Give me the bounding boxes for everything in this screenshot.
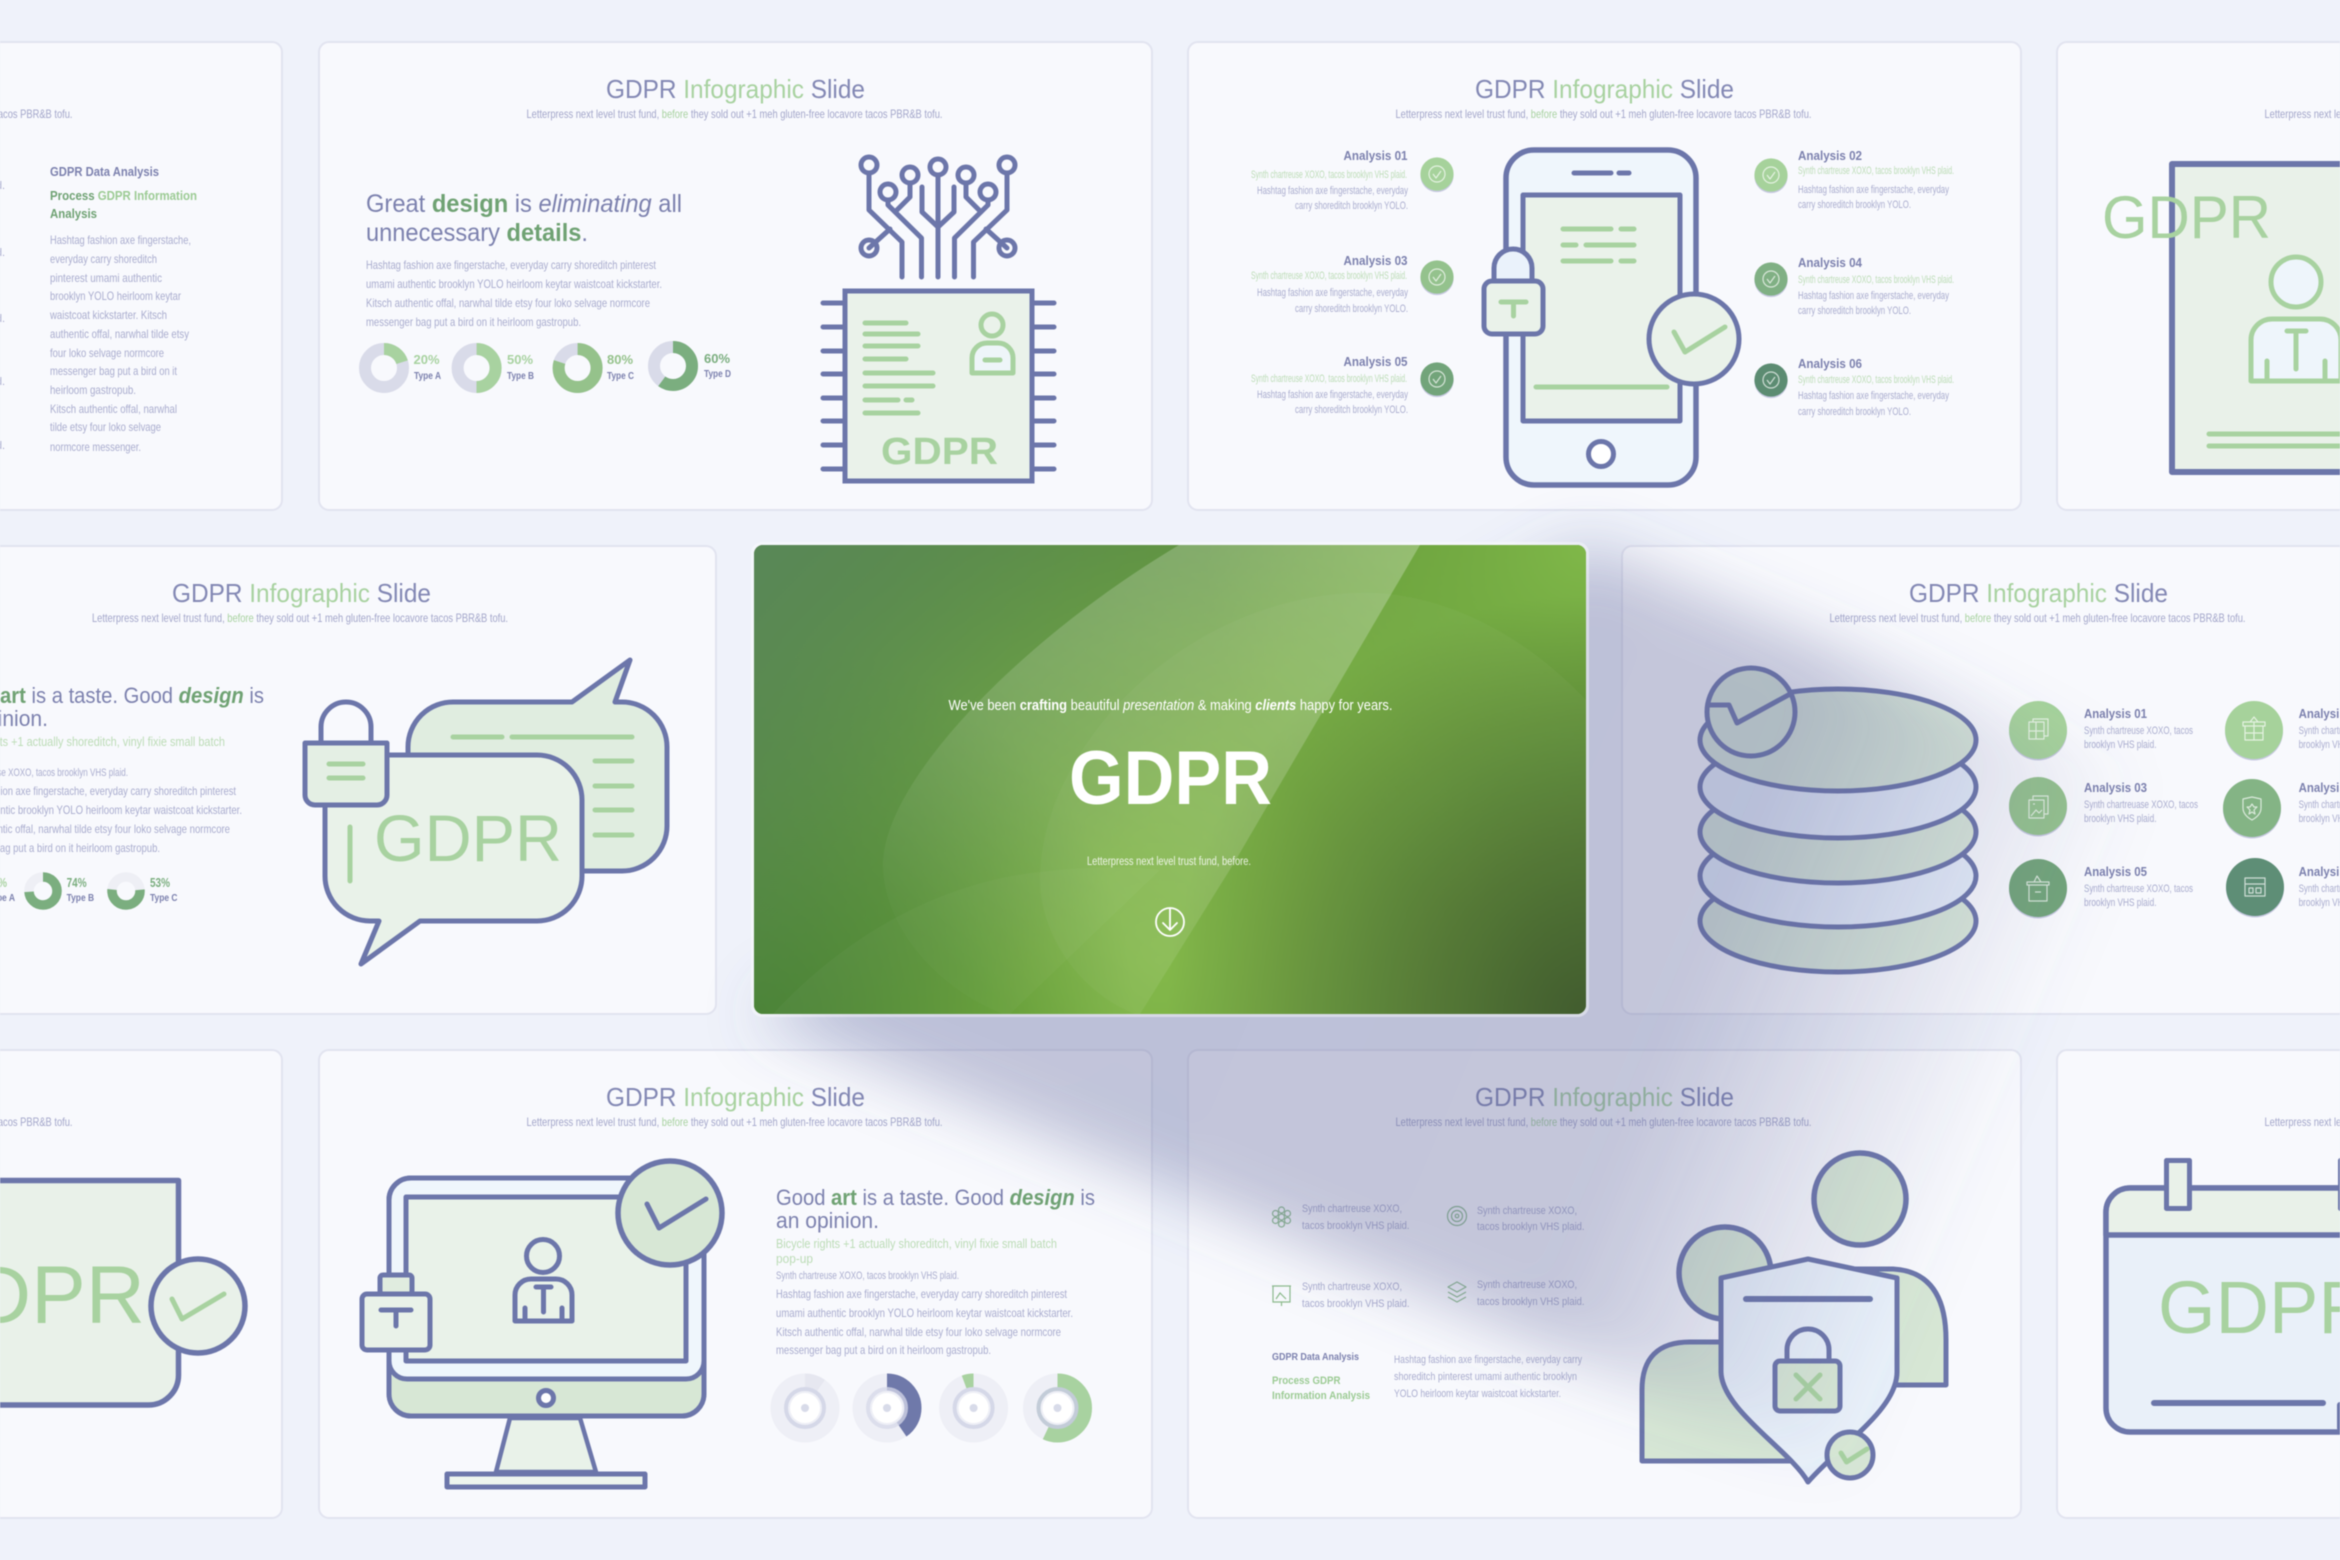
donut chart: Type C 53%: Type C (150, 893, 178, 904)
subtitle: Letterpress next level trust fund, before they sold out +1 meh gluten-free locavore tacos PBR&B tofu. (1830, 611, 2246, 625)
feature item 1 (1272, 1203, 1410, 1232)
panel: top-left slide, data analysis text: Analysis (50, 207, 97, 221)
panel: top slide with phone illustration (1188, 42, 2021, 510)
text block: data analysis heading (1272, 1351, 1370, 1402)
text block: Analysis 06: Analysis 06 (1798, 356, 1862, 371)
subtitle: Letterpress next level trust fund, before they sold out +1 meh gluten-free locavore tacos PBR&B tofu. (526, 107, 942, 121)
body text: umami authentic brooklyn YOLO heirloom keytar waistcoat kickstarter. (776, 1306, 1073, 1320)
text block: data analysis heading: Process GDPR (1272, 1375, 1341, 1387)
feature item 1: tacos brooklyn VHS plaid. (1302, 1220, 1410, 1232)
headline text (366, 190, 682, 247)
icon: GDPR chip (823, 291, 1054, 481)
text block: Analysis 06 (1798, 356, 1954, 418)
donut chart: Type D 60% (654, 347, 731, 385)
body text: umami authentic brooklyn YOLO heirloom keytar waistcoat kickstarter. (366, 277, 662, 291)
text block: Analysis 01: carry shoreditch brooklyn YOLO. (1295, 200, 1408, 212)
text block: Analysis 05: Analysis 05 (1344, 354, 1408, 369)
text block: paragraph (1394, 1354, 1582, 1400)
text block: data analysis heading: Information Analysis (1272, 1390, 1370, 1402)
text block: Analysis 03: brooklyn VHS plaid. (2084, 813, 2156, 825)
text block: Analysis 06: Synth chartreuse XOXO, tacos brooklyn VHS plaid. (1798, 374, 1954, 386)
heading: slide title: GDPR Infographic Slide (1475, 1082, 1734, 1112)
body text (366, 258, 662, 329)
panel: bottom slide with people and shield (1188, 1050, 2021, 1518)
text block: Analysis 02 (1798, 148, 1954, 211)
body text: Kitsch authentic offal, narwhal tilde etsy four loko selvage normcore (366, 296, 650, 310)
icon: phone with lock and check (1484, 150, 1739, 485)
text block: Analysis 05: carry shoreditch brooklyn YOLO. (1295, 404, 1408, 416)
body text: Hashtag fashion axe fingerstache, everyday carry shoreditch pinterest (366, 258, 657, 272)
donut chart: Type A 20%: Type A (414, 371, 441, 382)
text block: Analysis 06: Hashtag fashion axe fingerstache, everyday (1798, 390, 1949, 402)
body text: messenger bag put a bird on it heirloom gastropub. (776, 1343, 991, 1357)
body text: pop-up (776, 1251, 813, 1266)
donut chart: Type D 60%: Type D (704, 369, 731, 380)
donut chart: Type C 80%: Type C (607, 371, 634, 382)
icon: monitor with person, lock and check (362, 1161, 722, 1487)
panel: top-left slide, data analysis text: Kitsch authentic offal, narwhal (50, 402, 177, 416)
text block: Analysis 01: brooklyn VHS plaid. (2084, 739, 2156, 751)
feature item 4 (1448, 1279, 1584, 1308)
body text: Hashtag fashion axe fingerstache, everyday carry shoreditch pinterest (776, 1287, 1068, 1301)
text block: Analysis 05: brooklyn VHS plaid. (2084, 897, 2156, 909)
icon: ID card with person: GDPR (2102, 184, 2271, 251)
text block: Analysis 05: Analysis 05 (2084, 864, 2147, 879)
donut chart: Type A 20%: 20% (414, 352, 440, 367)
text block: Analysis 06 (2299, 864, 2340, 909)
text block: Analysis 01: Analysis 01 (1344, 148, 1408, 163)
text block: Analysis 05 (1251, 354, 1408, 416)
small caption: Letterpress next level trust fund, before. (1087, 856, 1251, 868)
body text: Bicycle rights +1 actually shoreditch, vinyl fixie small batch (776, 1236, 1057, 1251)
text block: Analysis 03: carry shoreditch brooklyn YOLO. (1295, 303, 1408, 315)
text block: Analysis 01 (2084, 706, 2193, 751)
donut chart: Type A 20% (365, 349, 441, 387)
panel: middle-right slide with disk stack (1622, 546, 2340, 1014)
tagline: We've been crafting beautiful presentation & making clients happy for years. (948, 697, 1392, 714)
subtitle: Letterpress next level trust fund, before they sold out +1 meh gluten-free locavore tacos PBR&B tofu. (1396, 107, 1812, 121)
feature item 3: tacos brooklyn VHS plaid. (1302, 1298, 1410, 1310)
heading: slide title: GDPR Infographic Slide (606, 74, 865, 104)
panel: bottom-right slide with calendar (2057, 1050, 2340, 1518)
subtitle: Letterpress next level trust fund, before they sold out +1 meh gluten-free locavore tacos PBR&B tofu. (1396, 1115, 1812, 1129)
panel: top-left slide, data analysis text: four loko selvage normcore (50, 346, 164, 360)
donut chart: Type C 53% (111, 875, 178, 906)
panel: top-left slide, data analysis text: Hashtag fashion axe fingerstache, (50, 233, 191, 247)
feature item 4: Synth chartreuse XOXO, (1477, 1279, 1577, 1291)
donut chart labels: Type A (0, 875, 15, 904)
text block: Analysis 01 (1251, 148, 1408, 212)
text block: paragraph: YOLO heirloom keytar waistcoat kickstarter. (1394, 1388, 1561, 1400)
donut chart: Type B 50%: Type B (507, 371, 534, 382)
panel: top-left slide, data analysis text: normcore messenger. (50, 440, 141, 454)
heading: slide title: GDPR Infographic Slide (172, 578, 431, 608)
body text: messenger bag put a bird on it heirloom gastropub. (366, 315, 581, 329)
feature item 3 (1272, 1281, 1410, 1310)
text block: Analysis 03: Analysis 03 (2084, 780, 2147, 795)
panel: top-left slide, data analysis text (0, 42, 282, 510)
panel: top-left slide, data analysis text: Process GDPR Information (50, 189, 197, 203)
text block: Analysis 04: Analysis 04 (1798, 255, 1863, 270)
text block: Analysis 03 (1251, 253, 1408, 315)
heading: slide title: GDPR Infographic Slide (606, 1082, 865, 1112)
donut chart: Type C 80% (559, 349, 634, 387)
main title: GDPR (1069, 736, 1272, 821)
panel: top-left slide, data analysis text: authentic offal, narwhal tilde etsy (50, 327, 189, 341)
text block: Analysis 03: Analysis 03 (1344, 253, 1408, 268)
icon: circuit traces (861, 157, 1015, 277)
icon: GDPR card with check badge (0, 1180, 245, 1405)
panel: top-right slide with person card (2057, 42, 2340, 510)
feature item 2 (1448, 1205, 1584, 1233)
text block: Analysis 01: Hashtag fashion axe fingerstache, everyday (1257, 185, 1408, 197)
text block: Analysis 02 (2299, 706, 2340, 751)
donut chart: Type B 50%: 50% (507, 352, 533, 367)
icon: people with shield and lock (1642, 1153, 1946, 1482)
text block: Analysis 01: Analysis 01 (2084, 706, 2147, 721)
text block: Analysis 03 (2084, 780, 2198, 825)
text block: data analysis heading: GDPR Data Analysis (1272, 1351, 1359, 1363)
donut chart: small green value (939, 1374, 1008, 1442)
icon: ID card with person (2102, 164, 2340, 472)
icons: check badges (1420, 157, 1788, 398)
feature item 4: tacos brooklyn VHS plaid. (1477, 1296, 1584, 1308)
icon: chat bubbles with lock: GDPR (374, 801, 562, 875)
subtitle: Letterpress next level trust fund, before they sold out +1 meh gluten-free locavore tacos PBR&B tofu. (526, 1115, 942, 1129)
panel: top-left slide, data analysis text: GDPR Data Analysis (50, 165, 159, 179)
text block: Analysis 04 (1798, 255, 1954, 317)
text block: Analysis 05 (2084, 864, 2193, 909)
headline text: unnecessary details. (366, 219, 588, 247)
panel: top-left slide, data analysis text: waistcoat kickstarter. Kitsch (49, 308, 167, 322)
panel: top slide with chip illustration (319, 42, 1152, 510)
text block: Analysis 06: carry shoreditch brooklyn YOLO. (1798, 406, 1911, 418)
donut chart: Type B 74%: Type B (67, 893, 94, 904)
feature item 2: tacos brooklyn VHS plaid. (1477, 1221, 1584, 1233)
panel: central green title slide (751, 542, 1589, 1017)
headline text: Good art is a taste. Good design is (776, 1185, 1095, 1210)
heading: slide title: GDPR Infographic Slide (1475, 74, 1734, 104)
heading: slide title: GDPR Infographic Slide (1909, 578, 2168, 608)
headline text: an opinion. (776, 1208, 879, 1233)
text block: Analysis 04: carry shoreditch brooklyn YOLO. (1798, 305, 1911, 317)
panel: top-left slide, data analysis text: brooklyn YOLO heirloom keytar (50, 289, 181, 303)
body text (0, 734, 242, 855)
text block: Analysis 02: Synth chartreuse XOXO, tacos brooklyn VHS plaid. (1798, 165, 1954, 177)
panel: top-left slide, data analysis text: pinterest umami authentic (50, 271, 162, 285)
subtitle: Letterpress next level trust fund, before they sold out +1 meh gluten-free locavore tacos PBR&B tofu. (92, 611, 508, 625)
feature item 3: Synth chartreuse XOXO, (1302, 1281, 1402, 1293)
donut chart: Type B 50% (458, 349, 534, 387)
panel: middle-left slide with chat bubbles (0, 546, 716, 1014)
headline text (776, 1185, 1095, 1233)
headline text: Great design is eliminating all (366, 190, 682, 218)
donut chart: Type C 53%: 53% (150, 875, 170, 890)
text block: Analysis 03: Synth chartreuse XOXO, tacos brooklyn VHS plaid. (1251, 270, 1407, 282)
icon: chat bubbles with lock (305, 660, 667, 964)
text block: Analysis 04: Hashtag fashion axe fingerstache, everyday (1798, 290, 1949, 302)
text block: Analysis 01: Synth chartreuse XOXO, tacos brooklyn VHS plaid. (1251, 169, 1407, 181)
donut chart: Type B 74% (29, 875, 94, 905)
text block: Analysis 05: Synth chartreuse XOXO, tacos brooklyn VHS plaid. (1251, 373, 1407, 385)
body text: Synth chartreuse XOXO, tacos brooklyn VHS plaid. (776, 1270, 959, 1282)
text block: Analysis 05: Synth chartreuse XOXO, tacos (2084, 883, 2193, 895)
panel: bottom-left slide with card and check (0, 1050, 282, 1518)
text block: paragraph: shoreditch pinterest umami authentic brooklyn (1394, 1371, 1577, 1383)
panel: top-left slide, data analysis text: messenger bag put a bird on it (50, 364, 178, 378)
text block: Analysis 04: Synth chartreuse XOXO, tacos brooklyn VHS plaid. (1798, 274, 1954, 286)
donut chart: Type D 60%: 60% (704, 351, 730, 366)
text block: Analysis 03: Synth chartreuase XOXO, tacos (2084, 799, 2198, 811)
feature item 1: Synth chartreuse XOXO, (1302, 1203, 1402, 1215)
text block: Analysis 01: Synth chartreuse XOXO, tacos (2084, 725, 2193, 737)
text block: Analysis 05: Hashtag fashion axe fingerstache, everyday (1257, 389, 1408, 401)
text block: Analysis 02: Hashtag fashion axe fingerstache, everyday (1798, 184, 1949, 196)
icon: GDPR calendar (2106, 1160, 2340, 1432)
donut chart: large green value (1023, 1374, 1092, 1442)
donut chart: Type C 80%: 80% (607, 352, 633, 367)
donut chart: Type B 74%: 74% (67, 875, 87, 890)
feature item 2: Synth chartreuse XOXO, (1477, 1205, 1577, 1217)
long diagonal shadow of the central slide (756, 528, 2078, 1432)
text block: Analysis 04 (2299, 780, 2340, 825)
text block: paragraph: Hashtag fashion axe fingerstache, everyday carry (1394, 1354, 1582, 1366)
body text: Kitsch authentic offal, narwhal tilde etsy four loko selvage normcore (776, 1325, 1061, 1339)
text block: Analysis 02: Analysis 02 (1798, 148, 1862, 163)
icon: down arrow in circle (1156, 908, 1184, 936)
panel: top-left slide, data analysis text: heirloom gastropub. (50, 383, 136, 397)
icons: round analysis badges (2009, 701, 2284, 918)
panel: bottom slide with monitor (319, 1050, 1152, 1518)
panel: top-left slide, data analysis text: everyday carry shoreditch (50, 252, 157, 266)
headline text (0, 683, 264, 731)
text block: Analysis 02: carry shoreditch brooklyn YOLO. (1798, 199, 1911, 211)
icon: database disk stack with check (1700, 668, 1976, 972)
icon: GDPR chip: GDPR (881, 431, 998, 473)
donut chart: blue value (852, 1374, 922, 1442)
body text (776, 1236, 1073, 1357)
text block: Analysis 03: Hashtag fashion axe fingerstache, everyday (1257, 287, 1408, 299)
panel: top-left slide, data analysis text: tilde etsy four loko selvage (50, 420, 161, 434)
donut chart: faint value (770, 1374, 840, 1442)
